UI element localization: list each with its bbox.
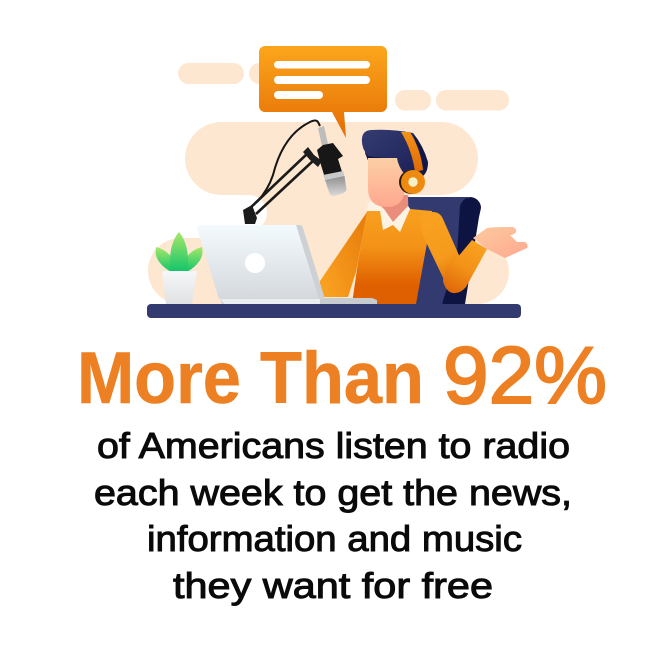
left arm	[320, 212, 367, 297]
body text: each week to get the news,	[94, 472, 572, 513]
earcup	[399, 170, 425, 194]
person	[320, 130, 528, 304]
speech bubble	[259, 46, 387, 138]
hair back	[365, 133, 428, 176]
body text	[94, 425, 572, 606]
headline	[77, 331, 607, 421]
body text: they want for free	[173, 565, 493, 606]
face	[368, 158, 405, 207]
background peach shapes	[148, 63, 509, 304]
collar	[367, 200, 411, 232]
body text: information and music	[147, 518, 522, 559]
right upper arm	[420, 212, 462, 286]
body text: of Americans listen to radio	[97, 425, 570, 466]
right forearm	[443, 240, 487, 293]
laptop	[197, 225, 377, 304]
plant	[156, 232, 202, 304]
headset band	[401, 132, 423, 172]
desk	[147, 304, 521, 318]
neck	[374, 195, 410, 224]
right hand	[473, 227, 528, 258]
hair	[362, 130, 424, 175]
microphone on boom arm	[243, 120, 346, 224]
headline: 92%	[443, 331, 607, 421]
torso	[352, 209, 432, 304]
chair	[408, 197, 481, 304]
headline: More Than	[77, 338, 424, 419]
